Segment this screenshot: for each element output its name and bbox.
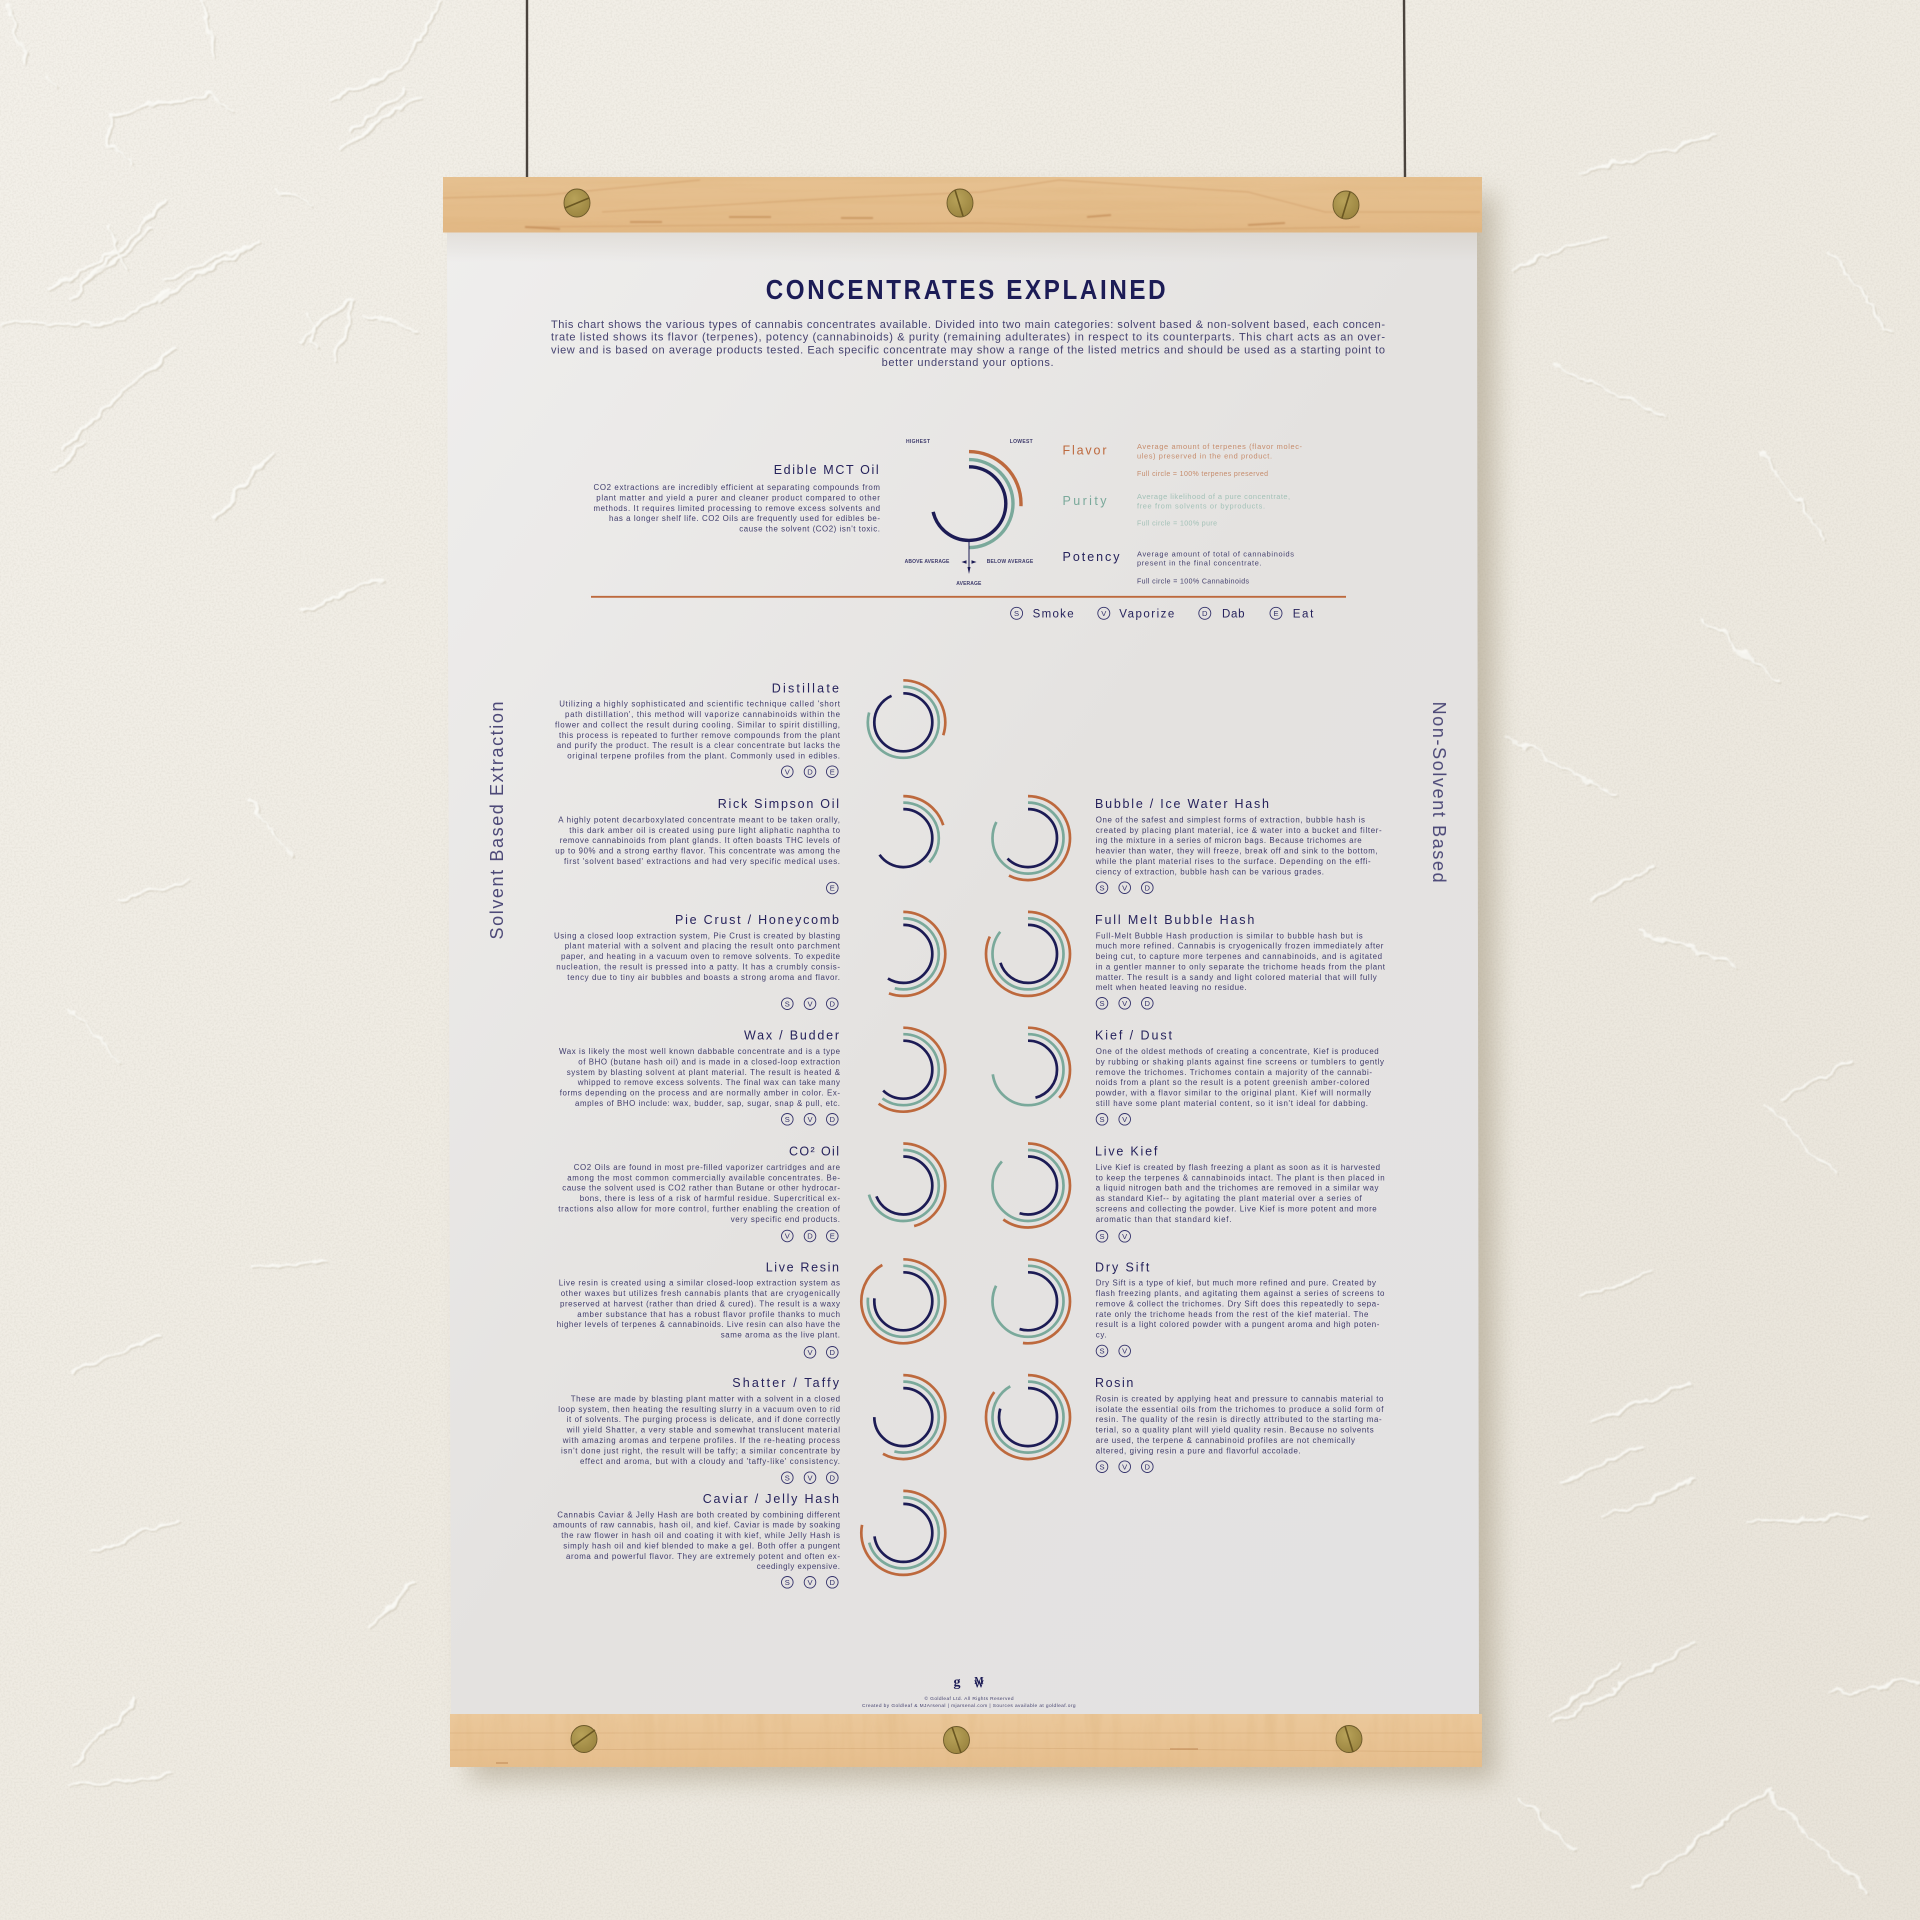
- usage icons: V: [1122, 999, 1128, 1008]
- panel: Shatter / Taffy: [558, 1375, 945, 1483]
- bar shadow on sheet: [447, 232, 1477, 262]
- description: created by placing plant material, ice & water into a bucket and filter-: [1096, 826, 1382, 835]
- heading: Pie Crust / Honeycomb: [675, 913, 839, 927]
- description: terial, so a quality plant will yield quality resin. Because no solvents: [1096, 1426, 1374, 1435]
- description: [1096, 931, 1386, 992]
- description: plant material with a solvent and placing the result onto parchment: [565, 942, 841, 951]
- panel: Kief / Dust: [986, 1028, 1384, 1125]
- description: CO2 Oils are found in most pre-filled vaporizer cartridges and are: [574, 1163, 841, 1172]
- description: These are made by blasting plant matter with a solvent in a closed: [571, 1394, 840, 1404]
- heading: Dry Sift: [1095, 1260, 1150, 1274]
- consumption method legend: Eat: [1293, 608, 1314, 620]
- intro text: This chart shows the various types of cannabis concentrates available. Divided into two main categories: solvent based & non-solvent based, each concen-: [551, 319, 1385, 331]
- flavor key: [1062, 442, 1303, 478]
- description: [1095, 816, 1382, 876]
- usage icons: S: [1099, 999, 1105, 1008]
- consumption method legend: V: [1101, 609, 1107, 618]
- panel: Caviar / Jelly Hash: [553, 1491, 945, 1588]
- description: of BHO (butane hash oil) and is made in a closed-loop extraction: [578, 1058, 840, 1066]
- panel: CO2 Oil: [558, 1144, 945, 1242]
- description: [554, 931, 841, 982]
- ring chart: [861, 680, 945, 764]
- panel: Full Melt Bubble Hash: [986, 912, 1386, 1009]
- description: are used, the terpene & cannabinoid profiles are not chemically: [1096, 1436, 1355, 1445]
- description: very specific end products.: [731, 1215, 840, 1224]
- description: Wax is likely the most well known dabbable concentrate and is a type: [559, 1047, 841, 1056]
- usage icons: S: [1099, 883, 1105, 892]
- description: among the most common commercially available concentrates. Be-: [567, 1173, 840, 1182]
- description: result is a light colored powder with a pungent aroma and high poten-: [1096, 1320, 1380, 1329]
- usage icons: D: [807, 767, 813, 776]
- legend heading: Edible MCT Oil: [774, 463, 879, 477]
- description: [553, 1510, 841, 1571]
- description: paper, and heating in a vacuum oven to remove solvents. To expedite: [561, 952, 841, 961]
- footer logos: M: [974, 1676, 984, 1687]
- bottom screw middle: [944, 1726, 970, 1754]
- legend axis labels: ABOVE AVERAGE: [905, 559, 950, 565]
- description: [557, 1279, 841, 1340]
- usage icons: D: [830, 1473, 836, 1482]
- consumption method legend: D: [1202, 609, 1208, 618]
- intro text: better understand your options.: [882, 357, 1054, 369]
- panel: Pie Crust / Honeycomb: [554, 912, 945, 1010]
- description: ing the mixture in a series of micron bags. Because trichomes are: [1096, 836, 1362, 845]
- consumption method legend: E: [1273, 609, 1279, 618]
- description: up to 90% and a strong earthy flavor. This concentrate was among the: [555, 847, 841, 856]
- usage icons: E: [830, 767, 835, 776]
- purity key: Purity: [1062, 494, 1107, 508]
- legend description: [594, 483, 880, 533]
- description: cause the solvent used is CO2 rather than Butane or other hydrocar-: [562, 1184, 840, 1193]
- description: flower and collect the result during cooling. Similar to spirit distilling,: [555, 720, 840, 729]
- usage icons: D: [1145, 1462, 1151, 1471]
- heading: Full Melt Bubble Hash: [1095, 913, 1254, 927]
- description: tency due to tiny air bubbles and boasts a strong aroma and flavor.: [567, 973, 840, 982]
- intro text: view and is based on average products tested. Each specific concentrate may show a range of the listed metrics and should be used as a starting point to: [551, 344, 1385, 356]
- usage icons: [1096, 882, 1153, 894]
- description: [1096, 1163, 1385, 1224]
- usage icons: E: [830, 884, 835, 893]
- top screw middle: [947, 189, 973, 217]
- usage icons: D: [807, 1232, 813, 1241]
- description: path distillation', this method will vaporize cannabinoids within the: [565, 710, 841, 719]
- description: [1096, 1394, 1384, 1455]
- usage icons: V: [807, 1473, 813, 1482]
- usage icons: D: [830, 1578, 836, 1587]
- intro text: trate listed shows its flavor (terpenes), potency (cannabinoids) & purity (remaining adulterates) in respect to its counterparts. This chart acts as an over-: [551, 332, 1385, 344]
- heading: Bubble / Ice Water Hash: [1095, 797, 1269, 811]
- description: flash freezing plants, and agitating them against a series of screens to: [1096, 1289, 1385, 1298]
- flavor key: Flavor: [1062, 444, 1106, 458]
- usage icons: [1096, 1114, 1130, 1125]
- description: aroma and powerful flavor. They are extremely potent and often ex-: [566, 1552, 840, 1561]
- usage icons: [1096, 1345, 1130, 1357]
- description: still have some plant material content, so it isn't ideal for dabbing.: [1096, 1099, 1368, 1108]
- heading: Rosin: [1095, 1376, 1133, 1390]
- panel: Live Kief: [986, 1144, 1385, 1242]
- description: altered, giving resin a pure and flavorful accolade.: [1096, 1446, 1301, 1455]
- description: this dark amber oil is created using pure light aliphatic naphtha to: [569, 826, 841, 835]
- usage icons: S: [1099, 1462, 1105, 1471]
- consumption method legend: [1011, 607, 1314, 620]
- panel: Dry Sift: [986, 1259, 1385, 1357]
- heading: Live Resin: [766, 1260, 839, 1274]
- ring chart: [861, 1259, 945, 1343]
- legend description: has a longer shelf life. CO2 Oils are frequently used for edibles be-: [609, 514, 880, 523]
- usage icons: D: [830, 999, 836, 1008]
- usage icons: V: [1122, 883, 1128, 892]
- description: Using a closed loop extraction system, Pie Crust is created by blasting: [554, 931, 840, 940]
- description: same aroma as the live plant.: [721, 1331, 840, 1340]
- description: noids from a plant so the result is a potent greenish amber-colored: [1096, 1078, 1369, 1087]
- description: amples of BHO include: wax, budder, sap, sugar, snap & pull, etc.: [575, 1099, 840, 1108]
- legend description: plant matter and yield a purer and cleaner product compared to other: [596, 494, 880, 502]
- description: to keep the terpenes & cannabinoids intact. The plant is then placed in: [1096, 1173, 1385, 1182]
- description: [1096, 1047, 1384, 1108]
- legend ring chart: [917, 452, 1021, 556]
- usage icons: S: [1099, 1347, 1105, 1356]
- description: matter. The result is a sandy and light colored material that will fully: [1096, 973, 1377, 982]
- top screw left: [564, 189, 590, 217]
- usage icons: [782, 1576, 838, 1588]
- ring chart: [986, 1028, 1070, 1112]
- usage icons: [782, 1230, 838, 1242]
- description: Rosin is created by applying heat and pressure to cannabis material to: [1096, 1394, 1384, 1404]
- description: first 'solvent based' extractions and had very specific medical uses.: [564, 857, 840, 866]
- legend axis labels: BELOW AVERAGE: [987, 559, 1034, 565]
- description: A highly potent decarboxylated concentrate meant to be taken orally,: [558, 816, 840, 824]
- description: by rubbing or shaking plants against fine screens or tumblers to gently: [1096, 1058, 1384, 1066]
- top wooden bar: [443, 177, 1482, 232]
- flavor key: Full circle = 100% terpenes preserved: [1137, 471, 1268, 478]
- heading: Live Kief: [1095, 1144, 1158, 1158]
- description: will yield Shatter, a very stable and somewhat translucent material: [566, 1426, 840, 1435]
- panel: Wax / Budder: [559, 1028, 945, 1125]
- usage icons: S: [785, 1473, 790, 1482]
- heading: Shatter / Taffy: [732, 1376, 840, 1390]
- panel: legend example Edible MCT Oil: [594, 439, 1303, 587]
- description: Live Kief is created by flash freezing a plant as soon as it is harvested: [1096, 1163, 1380, 1172]
- usage icons: V: [785, 767, 791, 776]
- usage icons: S: [785, 1115, 790, 1124]
- description: this process is repeated to further remove compounds from the plant: [559, 731, 841, 740]
- footer logos: [954, 1675, 984, 1690]
- bottom screw left: [571, 1726, 597, 1752]
- poster sheet: [447, 230, 1479, 1716]
- usage icons: [782, 998, 838, 1010]
- potency key: Potency: [1062, 550, 1120, 564]
- description: isolate the essential oils from the trichomes to produce a solid form of: [1096, 1405, 1384, 1414]
- hanging wire right: [1404, 0, 1405, 178]
- usage icons: S: [785, 999, 790, 1008]
- usage icons: V: [1122, 1115, 1128, 1124]
- usage icons: V: [785, 1232, 791, 1241]
- legend axis labels: AVERAGE: [956, 581, 982, 587]
- purity key: Full circle = 100% pure: [1137, 521, 1217, 528]
- description: a liquid nitrogen bath and the trichomes are removed in a similar way: [1096, 1184, 1378, 1193]
- bottom wooden bar: [450, 1714, 1482, 1767]
- ring chart: [861, 1491, 945, 1575]
- ring chart: [986, 1259, 1070, 1343]
- usage icons: V: [807, 1578, 813, 1587]
- description: One of the safest and simplest forms of extraction, bubble hash is: [1096, 816, 1365, 824]
- usage icons: V: [1122, 1462, 1128, 1471]
- usage icons: V: [1122, 1232, 1128, 1241]
- description: effect and aroma, but with a cloudy and 'taffy-like' consistency.: [580, 1457, 840, 1466]
- usage icons: [826, 882, 838, 894]
- description: isn't done just right, the result will be taffy; a similar concentrate by: [561, 1446, 840, 1455]
- description: remove & collect the trichomes. Dry Sift does this repeatedly to sepa-: [1096, 1299, 1380, 1308]
- potency key: Full circle = 100% Cannabinoids: [1137, 578, 1250, 585]
- top screw right: [1333, 191, 1359, 219]
- description: simply hash oil and kief blended to make a gel. Both offer a pungent: [563, 1541, 841, 1550]
- description: resin. The quality of the resin is directly attributed to the starting ma-: [1096, 1415, 1382, 1424]
- description: loop system, then heating the resulting slurry in a vacuum oven to rid: [558, 1405, 840, 1414]
- usage icons: [1096, 1230, 1130, 1242]
- consumption method legend: Smoke: [1033, 608, 1074, 620]
- legend divider line: [591, 596, 1346, 598]
- ring chart: [861, 796, 945, 880]
- usage icons: [1096, 998, 1153, 1009]
- description: amounts of raw cannabis, hash oil, and kief. Caviar is made by soaking: [553, 1521, 840, 1530]
- description: Full-Melt Bubble Hash production is similar to bubble hash but is: [1096, 931, 1363, 940]
- heading: Distillate: [772, 681, 839, 695]
- description: being cut, to capture more terpenes and cannabinoids, and is agitated: [1096, 952, 1382, 961]
- heading: Caviar / Jelly Hash: [703, 1492, 839, 1506]
- description: Cannabis Caviar & Jelly Hash are both created by combining different: [557, 1510, 841, 1519]
- description: the raw flower in hash oil and coating it with kief, while Jelly Hash is: [561, 1531, 840, 1540]
- description: [558, 1394, 840, 1466]
- description: screens and collecting the powder. Live Kief is more potent and more: [1096, 1204, 1377, 1213]
- usage icons: S: [1099, 1232, 1105, 1241]
- description: in a gentler manner to only separate the trichome heads from the plant: [1096, 962, 1386, 971]
- legend axis labels: [905, 439, 1034, 587]
- description: cy.: [1096, 1331, 1107, 1340]
- description: Dry Sift is a type of kief, but much more refined and pure. Created by: [1096, 1279, 1376, 1288]
- potency key: present in the final concentrate.: [1137, 559, 1262, 568]
- hanging wire left: [526, 0, 528, 178]
- description: ceedingly expensive.: [757, 1562, 840, 1571]
- description: system by blasting solvent at plant material. The result is heated &: [567, 1068, 841, 1077]
- usage icons: V: [1122, 1347, 1128, 1356]
- usage icons: V: [807, 1115, 813, 1124]
- usage icons: S: [785, 1578, 790, 1587]
- usage icons: [804, 1346, 838, 1358]
- panel: Bubble / Ice Water Hash: [986, 796, 1382, 894]
- ring chart: [986, 1144, 1070, 1228]
- bottom screw right: [1336, 1726, 1362, 1752]
- usage icons: D: [1145, 883, 1151, 892]
- ring chart: [986, 1375, 1070, 1459]
- panel: Live Resin: [557, 1259, 945, 1358]
- ring chart: [861, 1028, 945, 1112]
- description: and purify the product. The result is a clear concentrate but lacks the: [557, 741, 841, 750]
- purity key: free from solvents or byproducts.: [1137, 501, 1265, 510]
- heading: Kief / Dust: [1095, 1029, 1173, 1043]
- legend description: methods. It requires limited processing to remove excess solvents and: [594, 504, 880, 513]
- usage icons: [1096, 1461, 1153, 1472]
- description: [1096, 1279, 1385, 1340]
- description: original terpene profiles from the plant. Commonly used in edibles.: [567, 752, 840, 761]
- description: with amazing aromas and terpene profiles. If the re-heating process: [562, 1436, 840, 1445]
- consumption method legend: Dab: [1222, 608, 1244, 620]
- description: [559, 1047, 841, 1108]
- description: One of the oldest methods of creating a concentrate, Kief is produced: [1096, 1047, 1379, 1056]
- panel: Distillate: [555, 680, 945, 778]
- description: bons, there is less of a risk of harmful residue. Supercritical ex-: [580, 1194, 840, 1203]
- flavor key: ules) preserved in the end product.: [1137, 452, 1272, 461]
- panel: Rosin: [986, 1375, 1384, 1472]
- footer logos: g: [954, 1675, 960, 1690]
- description: preserved at harvest (rather than dried & cured). The result is a waxy: [560, 1299, 840, 1308]
- description: as standard Kief-- by agitating the plant material over a series of: [1096, 1194, 1362, 1203]
- consumption method legend: Vaporize: [1119, 608, 1174, 620]
- description: aromatic than that standard kief.: [1096, 1215, 1231, 1224]
- description: Live resin is created using a similar closed-loop extraction system as: [559, 1279, 840, 1288]
- usage icons: [782, 1472, 838, 1483]
- potency key: [1062, 549, 1294, 585]
- description: amber substance that has a robust flavor profile thanks to much: [577, 1310, 840, 1319]
- usage icons: E: [830, 1232, 835, 1241]
- usage icons: S: [1099, 1115, 1105, 1124]
- description: powder, with a flavor similar to the original plant. Kief will normally: [1096, 1089, 1371, 1098]
- footer logos: W: [974, 1680, 984, 1690]
- description: other waxes but utilizes fresh cannabis plants that are cryogenically: [561, 1289, 840, 1298]
- footer credits: © Goldleaf Ltd. All Rights Reserved: [924, 1695, 1014, 1702]
- poster content: [487, 276, 1449, 1709]
- description: [558, 1163, 841, 1224]
- description: ciency of extraction, bubble hash can be various grades.: [1096, 867, 1324, 876]
- description: [555, 816, 841, 866]
- description: it of solvents. The purging process is delicate, and if done correctly: [567, 1415, 840, 1424]
- ring chart: [861, 1375, 945, 1459]
- usage icons: V: [807, 1348, 813, 1357]
- title: CONCENTRATES EXPLAINED: [766, 276, 1166, 305]
- description: remove cannabinoids from plant glands. It often boasts THC levels of: [560, 836, 841, 845]
- description: Utilizing a highly sophisticated and scientific technique called 'short: [559, 700, 841, 709]
- flavor key: Average amount of terpenes (flavor molec-: [1137, 442, 1303, 451]
- usage icons: [782, 766, 838, 778]
- description: heavier than water, they will freeze, break off and sink to the bottom,: [1096, 847, 1378, 856]
- legend axis labels: HIGHEST: [906, 439, 930, 445]
- description: whipped to remove excess solvents. The final wax can take many: [577, 1078, 840, 1087]
- purity key: [1062, 492, 1290, 528]
- purity key: Average likelihood of a pure concentrate,: [1137, 492, 1290, 501]
- description: tractions also allow for more control, further enabling the creation of: [558, 1204, 841, 1213]
- description: while the plant material rises to the surface. Depending on the effi-: [1095, 857, 1371, 866]
- description: higher levels of terpenes & cannabinoids. Live resin can also have the: [557, 1320, 841, 1329]
- consumption method legend: S: [1014, 609, 1019, 618]
- footer credits: [862, 1695, 1076, 1709]
- usage icons: V: [807, 999, 813, 1008]
- side label: solvent based: Solvent Based Extraction: [487, 702, 507, 940]
- legend description: cause the solvent (CO2) isn't toxic.: [739, 524, 880, 533]
- usage icons: D: [830, 1115, 836, 1124]
- footer credits: Created by Goldleaf & MJArsenal | mjarsenal.com | Sources available at goldleaf.org: [862, 1703, 1076, 1709]
- description: remove the trichomes. Trichomes contain a majority of the cannabi-: [1096, 1068, 1372, 1077]
- description: [555, 700, 841, 761]
- usage icons: D: [1145, 999, 1151, 1008]
- ring chart: [986, 796, 1070, 880]
- poster cast shadow: [470, 195, 1496, 1780]
- ring chart: [861, 1144, 945, 1228]
- description: rate only the trichome heads from the rest of the kief material. The: [1096, 1310, 1369, 1319]
- legend description: CO2 extractions are incredibly efficient at separating compounds from: [594, 483, 880, 492]
- side label: non-solvent based: Non-Solvent Based: [1429, 702, 1449, 883]
- panel: Rick Simpson Oil: [555, 796, 945, 894]
- ring chart: [861, 912, 945, 996]
- legend axis labels: LOWEST: [1010, 439, 1033, 445]
- description: nucleation, the result is pressed into a patty. It has a crumbly consis-: [556, 962, 840, 971]
- ring chart: [986, 912, 1070, 996]
- legend average axis arrows: [962, 540, 976, 574]
- usage icons: [782, 1114, 838, 1125]
- intro text: [551, 319, 1385, 369]
- usage icons: D: [830, 1348, 836, 1357]
- description: much more refined. Cannabis is cryogenically frozen immediately after: [1096, 942, 1384, 951]
- potency key: Average amount of total of cannabinoids: [1137, 549, 1294, 558]
- heading: CO² Oil: [789, 1144, 839, 1158]
- description: melt when heated leaving no residue.: [1096, 983, 1247, 992]
- heading: Wax / Budder: [744, 1029, 839, 1043]
- description: forms depending on the process and are normally amber in color. Ex-: [560, 1089, 840, 1098]
- heading: Rick Simpson Oil: [718, 797, 839, 811]
